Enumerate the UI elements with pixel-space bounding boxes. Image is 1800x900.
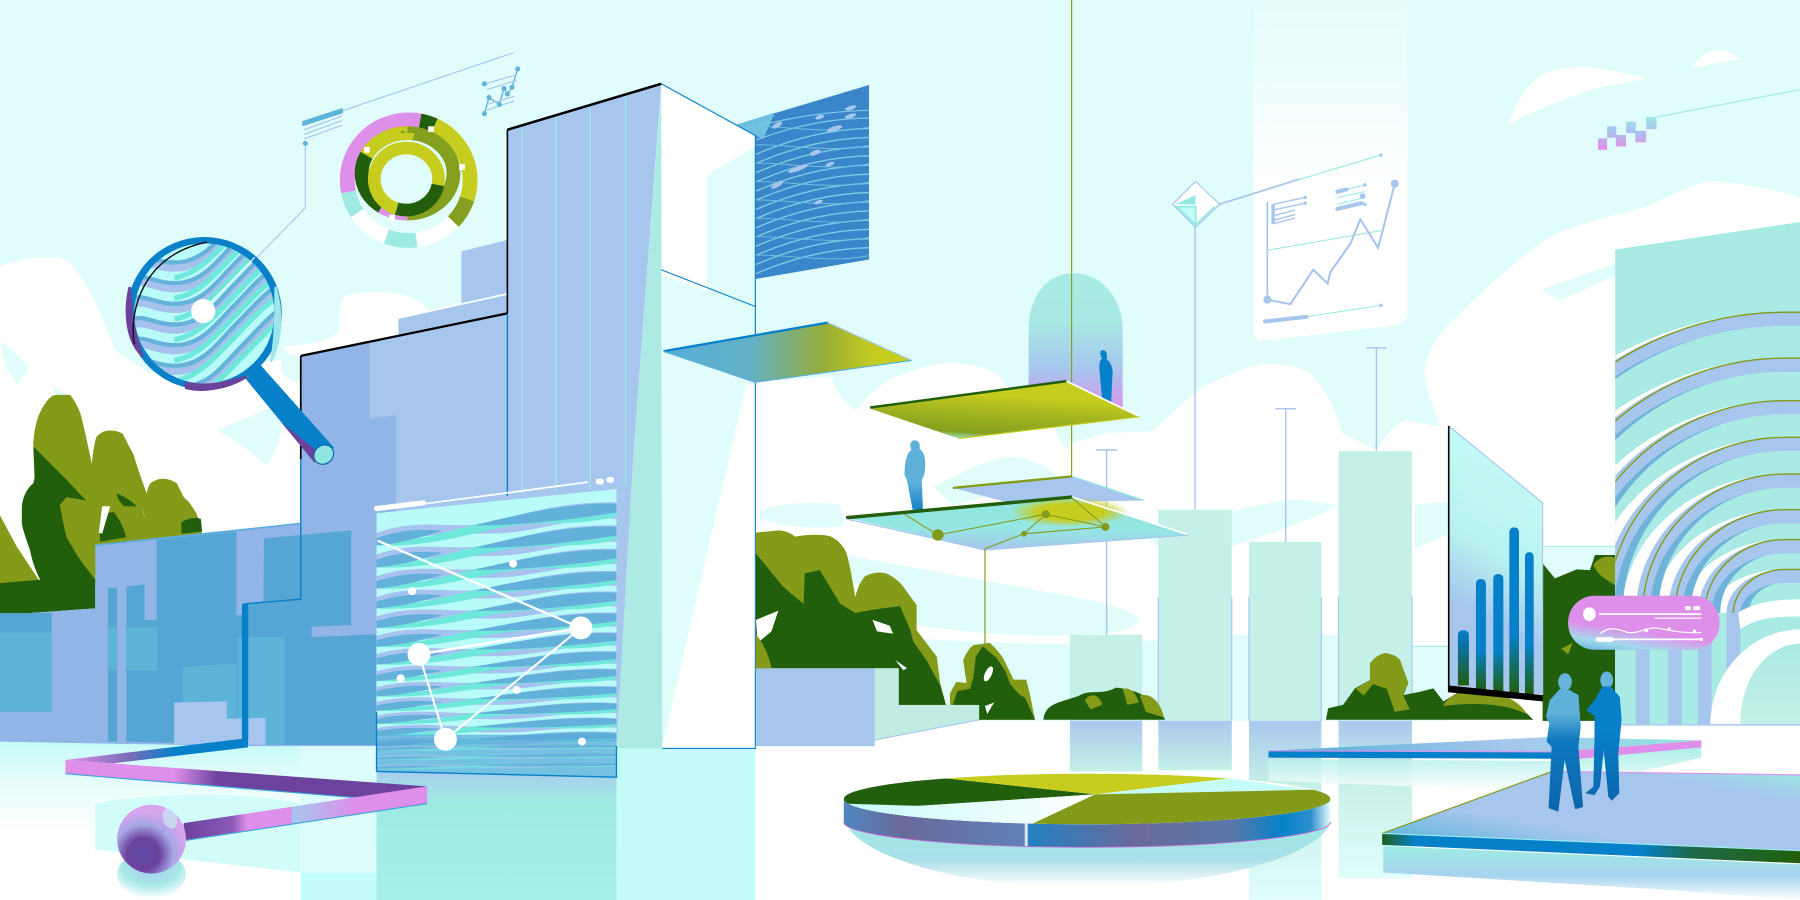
mini list lines [304, 116, 342, 139]
pink status pill [1568, 596, 1720, 650]
donut markers [364, 126, 465, 220]
building strong blue edge [242, 604, 248, 742]
cloud: behind building [282, 292, 430, 367]
plate network [905, 497, 1105, 549]
wave data panel [377, 477, 616, 781]
cloud: small top right [1508, 67, 1646, 125]
tower reflection floor [301, 746, 377, 872]
center tree [756, 530, 946, 705]
bush 3 [1043, 688, 1165, 720]
column 2 [1158, 510, 1232, 721]
front strip [65, 760, 427, 804]
column stems [1096, 227, 1387, 635]
low block behind center tree [756, 668, 979, 746]
green hanging line [1071, 0, 1073, 497]
lens [134, 243, 274, 383]
rim highlight [271, 287, 280, 362]
screen data dashes [770, 104, 857, 205]
pale lens [848, 556, 1138, 635]
arched wall [1615, 222, 1800, 726]
right platform shadow [1383, 846, 1800, 900]
person on plate [905, 440, 925, 510]
rim purple edge [127, 287, 247, 390]
tree gaps [756, 611, 907, 670]
column 4 [1339, 451, 1412, 721]
pink L-shaped strip and sphere [65, 738, 427, 899]
donut chart [347, 120, 470, 240]
sphere [117, 805, 186, 874]
mini line chart [482, 66, 520, 116]
network plate [846, 497, 1189, 550]
back strip [65, 738, 248, 763]
left lower building [0, 459, 376, 746]
tower front face [507, 84, 661, 750]
floor [0, 721, 1800, 900]
trees left [0, 395, 202, 615]
arch lilac bands [1615, 312, 1800, 724]
cloud: pale patches in left cloud [0, 342, 301, 465]
column 3 [1249, 542, 1321, 721]
pale sky band and streaks [755, 264, 1615, 721]
glass bar chart [1448, 426, 1543, 701]
rim [127, 237, 282, 390]
clouds [0, 51, 1800, 735]
hanging line lower [984, 549, 986, 645]
arched doorway [1029, 273, 1123, 411]
chart settings rows [1337, 185, 1365, 209]
person left [1546, 673, 1583, 812]
callout bar and dot [303, 109, 342, 146]
floor line of wall [1615, 724, 1800, 726]
cloud: tiny top right [1692, 51, 1740, 69]
pie side [844, 799, 1330, 847]
rear small block [461, 240, 507, 310]
tower side face [661, 84, 755, 748]
bush 4 [1326, 653, 1533, 720]
small lilac plate [953, 476, 1145, 503]
dark foliage [0, 447, 95, 615]
back building blocks [398, 240, 507, 344]
pale wedge below plate [1054, 425, 1070, 450]
middle ring [362, 133, 453, 214]
main tower [507, 84, 755, 750]
lighter window patches [0, 627, 285, 745]
person right [1585, 671, 1622, 801]
inner white arcs [1738, 599, 1800, 629]
pie top [844, 774, 1330, 824]
network nodes [397, 560, 592, 751]
handle [246, 365, 334, 463]
striped screen on tower [736, 85, 869, 279]
floating plate 1 [664, 323, 911, 382]
column 1 [1070, 635, 1142, 721]
rect outlines behind chart [1412, 546, 1615, 646]
magnifying glass [126, 237, 334, 465]
floating plate 2 [870, 381, 1140, 439]
strip to sphere [184, 786, 427, 840]
rear mid block [398, 294, 507, 344]
tree gaps [99, 506, 146, 534]
inner mint arch [1740, 644, 1800, 724]
arch olive lines [1615, 312, 1800, 613]
dark crown [756, 553, 946, 705]
pie chart shadow [846, 817, 1330, 886]
back platform [1268, 737, 1701, 761]
connector lines to magnifier [255, 53, 513, 259]
sphere shadow [117, 851, 186, 899]
line chart on panel [1219, 153, 1399, 321]
chart base [1448, 685, 1543, 701]
arch shadow bands [1615, 334, 1776, 613]
left floor reflection strip [95, 795, 301, 872]
reflection columns [1070, 451, 1412, 900]
cloud: left large [0, 257, 301, 643]
light window block [174, 701, 266, 745]
transparent upper-right chart panel [1254, 0, 1407, 341]
outer ring [347, 120, 470, 240]
olive foliage [0, 395, 202, 588]
tower teal wedge [616, 90, 662, 748]
pale streak mid [760, 503, 844, 528]
building thin edge [245, 459, 301, 604]
back platform shadow [1268, 747, 1701, 792]
network lines [378, 541, 581, 739]
small figure in arch [1099, 350, 1113, 402]
olive crown [756, 530, 946, 705]
arch white crescents [1615, 316, 1800, 613]
cloud: center and right mass [755, 181, 1800, 735]
left tower body [248, 313, 507, 746]
bush 2 [950, 643, 1035, 720]
panel reflection [377, 771, 616, 900]
right platform [1382, 771, 1800, 863]
inner ring [374, 148, 439, 210]
side pale panels [707, 147, 755, 347]
diamond icon [1173, 181, 1220, 227]
chart list rows [1272, 204, 1275, 224]
left floor tint [0, 742, 301, 833]
pie chart [844, 769, 1337, 847]
center dot and line [191, 299, 215, 323]
window overlays [0, 530, 376, 745]
back right tree [1543, 555, 1615, 721]
panel header [377, 477, 614, 509]
checker icon [1598, 117, 1657, 150]
bars [1458, 630, 1469, 685]
